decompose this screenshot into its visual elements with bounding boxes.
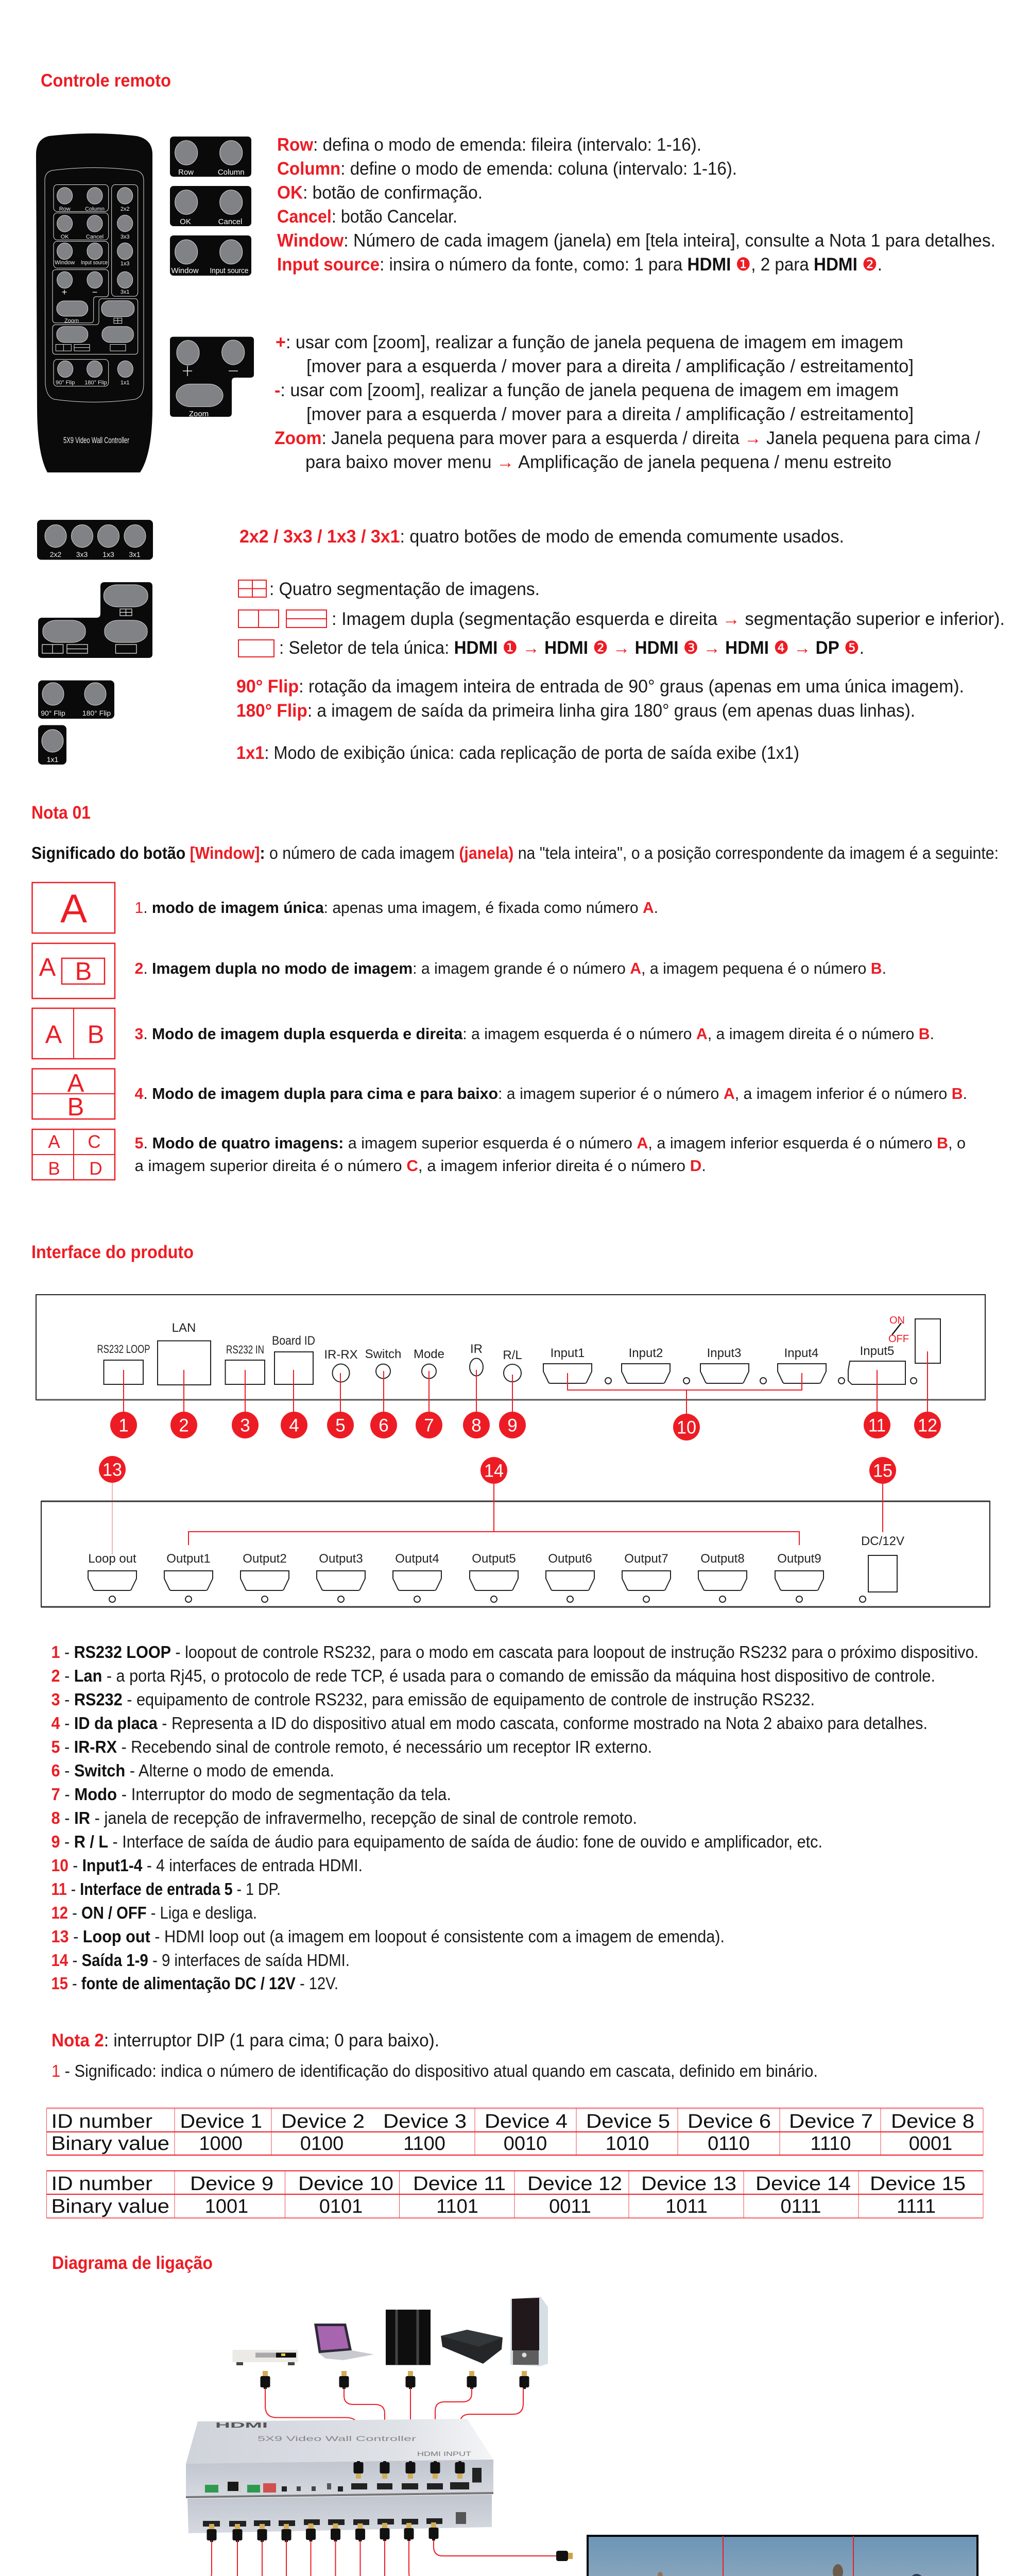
remote control illustration: 3x3 [121, 234, 130, 240]
panel: front interface: R/L [503, 1348, 522, 1362]
remote control illustration: − [92, 287, 97, 297]
remote control illustration: 180° Flip [84, 380, 107, 386]
diagram: four image mode: B [48, 1159, 60, 1179]
number markers: front interface 1 to 12: 8 [471, 1416, 482, 1435]
button panel: Window and Input source: Window [171, 266, 199, 275]
table: device 1 to 8 binary values: Device 3 [383, 2111, 467, 2132]
device: video wall controller: HDMI [215, 2421, 268, 2430]
number markers: front interface 1 to 12: 9 [507, 1416, 518, 1435]
remote control illustration: Column [85, 206, 105, 212]
text block: interface list: 7 - Modo - Interruptor do modo de segmentação da tela. [52, 1785, 451, 1804]
remote control illustration: Zoom [64, 318, 79, 324]
icon: laptop source [314, 2324, 374, 2360]
number markers: rear interface 13 to 15: 14 [484, 1461, 504, 1481]
panel: front interface: RS232 LOOP [97, 1343, 150, 1355]
remote control illustration: Cancel [86, 234, 104, 240]
icon: game console source [386, 2310, 431, 2365]
panel: rear interface: Output6 [548, 1552, 592, 1566]
remote control illustration: Input source [81, 260, 108, 266]
table: device 1 to 8 binary values: 1100 [403, 2133, 445, 2155]
button panel: Window and Input source [170, 235, 251, 276]
remote control illustration: Row [59, 206, 71, 212]
text: four segmentation: : Quatro segmentação de imagens. [269, 579, 540, 599]
text block: interface list [52, 1642, 978, 1993]
remote control illustration: 1x3 [121, 261, 130, 267]
button panel: 90 and 180 flip: 90° Flip [41, 709, 65, 717]
panel: front interface: Mode [414, 1347, 444, 1361]
icon: desktop PC source [510, 2297, 548, 2366]
button panel: Row and Column: Row [178, 168, 194, 177]
panel: front interface: Input1 [551, 1346, 585, 1360]
panel: front interface: Input3 [707, 1346, 741, 1360]
heading: Controle remoto: Controle remoto [41, 71, 171, 91]
table: device 9 to 15 binary values: 1111 [897, 2196, 936, 2217]
table: device 9 to 15 binary values: 1011 [665, 2196, 708, 2217]
button panel: Row and Column: Column [218, 168, 245, 177]
text: DIP meaning: 1 - Significado: indica o número de identificação do dispositivo atual quando em cascata, definido em binário. [52, 2061, 818, 2080]
button panel: OK and Cancel: OK [180, 217, 191, 226]
table: device 9 to 15 binary values: 0111 [781, 2196, 821, 2217]
text block: plus, minus, zoom descriptions: [mover para a esquerda / mover para a direita / amplificação / estreitamento] [306, 357, 914, 376]
text block: interface list: 1 - RS232 LOOP - loopout de controle RS232, para o modo em cascata para loopout de instrução RS232 para o próximo dispositivo. [52, 1642, 978, 1662]
button panel: 1x1 [38, 725, 66, 765]
number markers: front interface 1 to 12: 11 [868, 1416, 886, 1435]
text block: interface list: 4 - ID da placa - Representa a ID do dispositivo atual em modo cascata, conforme mostrado na Nota 2 abaixo para detalhes. [52, 1714, 928, 1733]
panel: front interface: LAN [172, 1321, 196, 1335]
connectors: controller input plugs [353, 2461, 465, 2479]
number markers: front interface 1 to 12: 4 [289, 1416, 299, 1435]
panel: front interface: Input4 [784, 1346, 818, 1360]
table: device 1 to 8 binary values [46, 2108, 983, 2155]
icon: dual split [238, 610, 327, 628]
video wall: balloon image split 3x3 [587, 2535, 978, 2576]
button panel: 2x2 3x3 1x3 3x1: 2x2 [50, 550, 61, 558]
button panel: plus, minus and zoom [170, 337, 254, 418]
text block: button descriptions [277, 135, 995, 275]
text block: plus, minus, zoom descriptions: -: usar com [zoom], realizar a função de janela pequena de imagem em imagem [274, 380, 899, 400]
text block: interface list: 2 - Lan - a porta Rj45, o protocolo de rede TCP, é usada para o comando de emissão da máquina host dispositivo de controle. [52, 1666, 935, 1685]
remote control illustration: 3x1 [121, 289, 130, 295]
button panel: 2x2 3x3 1x3 3x1: 3x1 [129, 550, 141, 558]
button panel: Row and Column [170, 137, 251, 177]
text block: interface list: 11 - Interface de entrada 5 - 1 DP. [52, 1879, 281, 1899]
diagram: four image mode: C [88, 1132, 101, 1152]
panel: front interface: RS232 IN [226, 1343, 264, 1356]
number markers: front interface 1 to 12 [110, 1412, 941, 1440]
device: video wall controller: 5X9 Video Wall Controller [258, 2434, 417, 2443]
number markers: rear interface 13 to 15: 13 [102, 1460, 122, 1480]
text block: interface list: 5 - IR-RX - Recebendo sinal de controle remoto, é necessário um receptor IR externo. [52, 1737, 652, 1756]
diagram: picture in picture mode: A [39, 954, 56, 981]
diagram: top and bottom dual mode: B [67, 1093, 84, 1121]
connectors: output cables to video wall [164, 2522, 573, 2576]
table: device 1 to 8 binary values: Device 5 [586, 2111, 670, 2132]
remote control illustration: OK [61, 234, 69, 240]
table: device 9 to 15 binary values: Device 13 [641, 2173, 736, 2195]
text block: button descriptions: Column: define o modo de emenda: coluna (intervalo: 1-16). [277, 159, 737, 179]
button panel: 90 and 180 flip [38, 681, 114, 719]
device: video wall controller: HDMI INPUT [417, 2450, 472, 2458]
remote control illustration: 2x2 [121, 206, 130, 212]
text block: plus, minus, zoom descriptions: para baixo mover menu → Amplificação de janela pequena / menu estreito [305, 452, 891, 472]
text: item 3: 3. Modo de imagem dupla esquerda e direita: a imagem esquerda é o número A, a imagem direita é o número B. [135, 1025, 934, 1043]
number markers: front interface 1 to 12: 1 [118, 1416, 129, 1435]
table: device 9 to 15 binary values: Device 11 [413, 2173, 506, 2195]
number markers: front interface 1 to 12: 3 [240, 1416, 250, 1435]
heading: Nota 01: Nota 01 [31, 803, 91, 823]
diagram: single image mode [32, 883, 115, 933]
text: item 5 [135, 1134, 966, 1175]
table: device 1 to 8 binary values: 0100 [300, 2133, 344, 2155]
text block: interface list: 8 - IR - janela de recepção de infravermelho, recepção de sinal de controle remoto. [52, 1808, 637, 1827]
remote control illustration [36, 133, 152, 472]
panel: rear interface: DC/12V [861, 1534, 904, 1548]
heading: Interface do produto: Interface do produto [31, 1242, 194, 1262]
text: single screen selector: : Seletor de tela única: HDMI ❶ → HDMI ❷ → HDMI ❸ → HDMI ❹ → DP ❺. [279, 638, 864, 658]
device: video wall controller [186, 2419, 493, 2533]
table: device 9 to 15 binary values: Device 14 [756, 2173, 851, 2195]
text block: interface list: 12 - ON / OFF - Liga e desliga. [52, 1903, 257, 1922]
icon: four-way split [238, 580, 266, 597]
table: device 1 to 8 binary values: 1110 [811, 2133, 851, 2155]
text: item 1: 1. modo de imagem única: apenas uma imagem, é fixada como número A. [135, 899, 658, 917]
table: device 9 to 15 binary values: ID number [52, 2173, 152, 2195]
table: device 1 to 8 binary values: 0001 [909, 2133, 952, 2155]
button panel: Window and Input source: Input source [210, 266, 248, 275]
table: device 9 to 15 binary values: Device 12 [527, 2173, 622, 2195]
text block: interface list: 10 - Input1-4 - 4 interfaces de entrada HDMI. [52, 1856, 363, 1875]
text block: plus, minus, zoom descriptions: [mover para a esquerda / mover para a direita / amplificação / estreitamento] [306, 404, 914, 425]
table: device 1 to 8 binary values: Device 4 [485, 2111, 568, 2132]
button panel: 2x2 3x3 1x3 3x1: 3x3 [76, 550, 88, 558]
button panel: 1x1: 1x1 [47, 755, 58, 764]
diagram: top and bottom dual mode: A [67, 1070, 84, 1097]
text block: interface list: 6 - Switch - Alterne o modo de emenda. [52, 1761, 334, 1780]
table: device 1 to 8 binary values: Device 1 [180, 2111, 262, 2132]
button panel: split and screen selector [38, 582, 152, 658]
text: dual image: : Imagem dupla (segmentação esquerda e direita → segmentação superior e inferior). [332, 609, 1005, 629]
text: 1x1 mode: 1x1: Modo de exibição única: cada replicação de porta de saída exibe (1x1) [236, 743, 799, 763]
table: device 9 to 15 binary values: 1101 [436, 2196, 478, 2217]
remote control illustration: 5X9 Video Wall Controller [63, 435, 129, 445]
text block: button descriptions: Cancel: botão Cancelar. [277, 207, 457, 227]
text: item 4: 4. Modo de imagem dupla para cima e para baixo: a imagem superior é o número A, a imagem inferior é o número B. [135, 1084, 967, 1103]
table: device 1 to 8 binary values: Device 6 [688, 2111, 771, 2132]
button panel: OK and Cancel [170, 186, 251, 226]
icon: DVR source [233, 2350, 298, 2365]
text block: interface list: 14 - Saída 1-9 - 9 interfaces de saída HDMI. [52, 1951, 350, 1970]
text block: button descriptions: Input source: insira o número da fonte, como: 1 para HDMI ❶, 2 para HDMI ❷. [277, 255, 882, 275]
diagram: single image mode: A [60, 886, 87, 931]
remote control illustration: + [62, 287, 67, 297]
diagram: left and right dual mode: B [88, 1021, 104, 1049]
panel: rear interface: Output9 [777, 1552, 821, 1566]
panel: front interface: Switch [365, 1347, 401, 1361]
panel: rear interface: Output7 [624, 1552, 668, 1566]
table: device 9 to 15 binary values: Device 9 [190, 2173, 273, 2195]
panel: rear interface: Loop out [88, 1552, 136, 1566]
table: device 9 to 15 binary values: 0101 [319, 2196, 363, 2217]
text block: plus, minus, zoom descriptions: Zoom: Janela pequena para mover para a esquerda / direita → Janela pequena para cima / [274, 428, 980, 448]
remote control illustration: 90° Flip [56, 380, 75, 386]
connectors: source cables [261, 2371, 529, 2462]
diagram: picture in picture mode [32, 943, 115, 998]
table: device 9 to 15 binary values: 0011 [549, 2196, 591, 2217]
text block: button descriptions: Row: defina o modo de emenda: fileira (intervalo: 1-16). [277, 135, 701, 155]
text: item 2: 2. Imagem dupla no modo de imagem: a imagem grande é o número A, a imagem pequena é o número B. [135, 959, 886, 977]
panel: front interface: Input2 [629, 1346, 663, 1360]
table: device 1 to 8 binary values: ID number [52, 2111, 152, 2132]
text block: interface list: 3 - RS232 - equipamento de controle RS232, para emissão de equipamento de controle de instrução RS232. [52, 1690, 815, 1709]
panel: front interface: ON [889, 1315, 905, 1326]
icon: single screen [238, 640, 274, 657]
number markers: front interface 1 to 12: 7 [424, 1416, 434, 1435]
button panel: OK and Cancel: Cancel [218, 217, 242, 226]
text: flip modes: 90° Flip: rotação da imagem inteira de entrada de 90° graus (apenas em uma única imagem). [236, 676, 964, 697]
remote control illustration: 1x1 [121, 380, 130, 386]
table: device 1 to 8 binary values: 1000 [199, 2133, 243, 2155]
text block: interface list: 13 - Loop out - HDMI loop out (a imagem em loopout é consistente com a imagem de emenda). [52, 1927, 725, 1946]
panel: rear interface: Output2 [243, 1552, 287, 1566]
text: item 5: 5. Modo de quatro imagens: a imagem superior esquerda é o número A, a imagem inferior esquerda é o número B, o [135, 1134, 966, 1152]
text block: plus, minus, zoom descriptions [274, 332, 980, 472]
table: device 1 to 8 binary values: Binary value [52, 2133, 169, 2155]
panel: front interface: IR-RX [324, 1348, 358, 1362]
number markers: front interface 1 to 12: 10 [677, 1418, 696, 1437]
button panel: 2x2 3x3 1x3 3x1 [37, 520, 153, 560]
panel: front interface: IR [470, 1342, 483, 1356]
diagram: top and bottom dual mode [32, 1069, 115, 1121]
panel: front interface: Input5 [860, 1344, 894, 1358]
table: device 9 to 15 binary values: Binary value [52, 2196, 169, 2217]
text block: interface list: 15 - fonte de alimentação DC / 12V - 12V. [52, 1974, 338, 1993]
number markers: front interface 1 to 12: 6 [379, 1416, 389, 1435]
text block: plus, minus, zoom descriptions: +: usar com [zoom], realizar a função de janela pequena de imagem em imagem [276, 332, 903, 352]
panel: front interface: Board ID [272, 1334, 315, 1348]
heading: Diagrama de ligação: Diagrama de ligação [52, 2253, 213, 2273]
text: flip modes: 180° Flip: a imagem de saída da primeira linha gira 180° graus (em apenas duas linhas). [236, 701, 915, 721]
text: Nota 2: Nota 2: interruptor DIP (1 para cima; 0 para baixo). [52, 2030, 439, 2050]
text block: button descriptions: Window: Número de cada imagem (janela) em [tela inteira], consulte a Nota 1 para detalhes. [277, 231, 995, 250]
panel: front interface: OFF [888, 1333, 909, 1345]
panel: rear interface: Output5 [472, 1552, 516, 1566]
diagram: four image mode: A [48, 1132, 60, 1152]
number markers: rear interface 13 to 15: 15 [873, 1461, 892, 1481]
table: device 1 to 8 binary values: 1010 [606, 2133, 649, 2155]
table: device 1 to 8 binary values: 0010 [504, 2133, 547, 2155]
panel: rear interface: Output1 [166, 1552, 211, 1566]
table: device 9 to 15 binary values: Device 15 [870, 2173, 966, 2195]
table: device 9 to 15 binary values: 1001 [205, 2196, 248, 2217]
text: item 5: a imagem superior direita é o número C, a imagem inferior direita é o número D. [135, 1157, 706, 1175]
number markers: front interface 1 to 12: 5 [335, 1416, 346, 1435]
table: device 9 to 15 binary values [46, 2171, 983, 2218]
button panel: 90 and 180 flip: 180° Flip [82, 709, 111, 717]
text block: interface list: 9 - R / L - Interface de saída de áudio para equipamento de saída de áudio: fone de ouvido e amplificador, etc. [52, 1832, 822, 1851]
panel: rear interface: Output3 [319, 1552, 363, 1566]
panel: rear interface [41, 1469, 990, 1607]
diagram: picture in picture mode: B [75, 958, 92, 986]
number markers: rear interface 13 to 15 [99, 1456, 896, 1484]
panel: rear interface: Output4 [395, 1552, 439, 1566]
number markers: front interface 1 to 12: 2 [179, 1416, 189, 1435]
icon: media box source [441, 2330, 503, 2364]
table: device 1 to 8 binary values: Device 8 [891, 2111, 974, 2132]
text: flip modes [236, 676, 964, 721]
diagram: left and right dual mode: A [45, 1021, 62, 1049]
diagram: four image mode [32, 1129, 115, 1180]
number markers: front interface 1 to 12: 12 [918, 1416, 937, 1435]
remote control illustration: Window [55, 260, 75, 266]
table: device 9 to 15 binary values: Device 10 [298, 2173, 393, 2195]
table: device 1 to 8 binary values: 0110 [708, 2133, 750, 2155]
text: splice modes: 2x2 / 3x3 / 1x3 / 3x1: quatro botões de modo de emenda comumente usados. [239, 527, 844, 547]
text block: button descriptions: OK: botão de confirmação. [277, 182, 483, 203]
table: device 1 to 8 binary values: Device 2 [281, 2111, 365, 2132]
panel: front interface [36, 1295, 985, 1415]
panel: rear interface: Output8 [700, 1552, 745, 1566]
diagram: left and right dual mode [32, 1008, 115, 1059]
button panel: plus, minus and zoom: Zoom [189, 410, 209, 418]
diagram: four image mode: D [89, 1159, 102, 1179]
table: device 1 to 8 binary values: Device 7 [789, 2111, 873, 2132]
text: window button meaning: Significado do botão [Window]: o número de cada imagem (janela) na "tela inteira", o a posição correspondente da imagem é a seguinte: [31, 843, 999, 862]
button panel: 2x2 3x3 1x3 3x1: 1x3 [102, 550, 114, 558]
